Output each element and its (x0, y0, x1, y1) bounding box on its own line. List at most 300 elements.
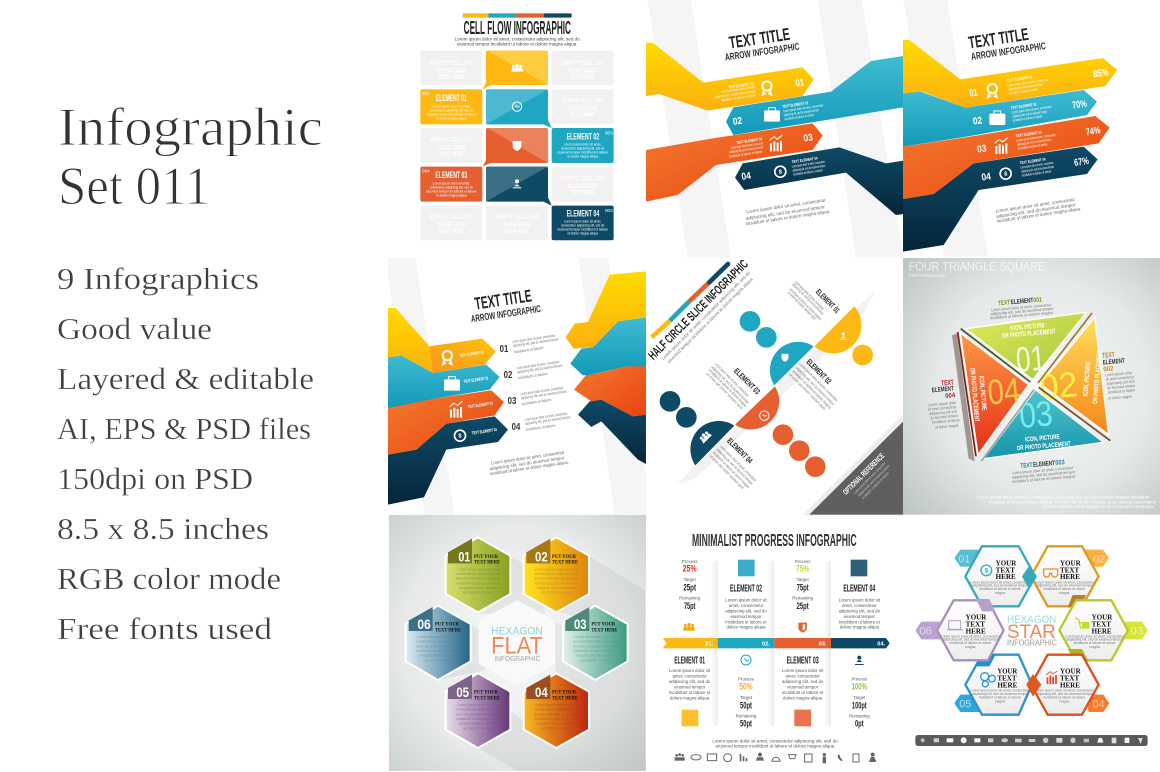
yellow ribbon: Lorem ipsum dolor sit amet, consectetur (721, 85, 756, 94)
hexagon 04 red: incididunt ut labore et dolore (1043, 695, 1085, 699)
hexagon 01 teal: incididunt ut labore et dolore (979, 587, 1021, 591)
hexagon 04: sed do eiusmod tempor (534, 711, 579, 716)
panel: hexagon flat infographic (389, 515, 646, 771)
footer text (976, 495, 1157, 509)
teal arrow (903, 90, 1097, 147)
hexagon 02: 02 (535, 548, 548, 564)
hexagon 03: consectetur adipiscing elit (573, 639, 619, 644)
empty cell labels: EMPTY CELL 001 (430, 60, 473, 67)
hexagon 05: magna aliqua ut enim (459, 721, 499, 726)
navy arrow: adipiscing elit, sed do eiusmod tempor (1021, 165, 1055, 174)
text element 003: ELEMENT (1033, 460, 1055, 469)
empty cells (420, 51, 614, 240)
text element 004: Lorem ipsum dolor (928, 400, 957, 407)
element 04 block: Lorem ipsum dolor sit (839, 597, 881, 602)
element 04 block: eiusmod tempor (844, 614, 875, 619)
intro text: Lorem ipsum dolor sit amet, consectetur adipiscing elit, sed do (455, 36, 580, 41)
central label: HEXAGON (491, 626, 543, 638)
hexagon 04: PUT YOUR (552, 691, 576, 696)
feature list: 150dpi on PSD (57, 461, 253, 496)
orange arrow (903, 116, 1110, 199)
hexagon 05 blue: adipiscing elit, sed do eiusmod tempor (972, 692, 1029, 696)
text element 002: sit amet consectetur (1106, 374, 1134, 382)
left orange arrow (388, 390, 504, 455)
empty cell labels: PLEASE ENTER (568, 183, 597, 190)
body text: adipiscing elit, sed do eiusmod tempor (489, 455, 565, 471)
text element 003: 003 (1055, 459, 1065, 467)
element 04 block: amet, consectetur (842, 603, 877, 608)
text element 004: et dolore magna (935, 423, 959, 430)
hexagon 01: 01 (458, 548, 470, 564)
footer text: Lorem ipsum dolor sit amet, consectetur adipiscing elit, sed do eiusmod tempor incididunt (976, 495, 1150, 500)
intro text (455, 36, 580, 46)
triangle 01 green: 01 (1014, 339, 1047, 380)
text element 002: adipiscing elit sed (1106, 379, 1135, 386)
text element 004: incididunt ut labore (932, 417, 961, 425)
element 01 block: Lorem ipsum dolor sit (669, 668, 711, 673)
hexagon 06: Lorem ipsum dolor sit amet (417, 634, 461, 639)
hexagon 03 (563, 606, 628, 680)
yellow arrow (903, 40, 1117, 108)
step number 04: 04 (512, 422, 521, 433)
element 01: incididunt ut labore et dolore magna (789, 287, 823, 321)
hexagon 02: TEXT HERE (552, 561, 579, 566)
element 03: et dolore magna aliqua (436, 193, 467, 197)
badge 05 (954, 695, 980, 712)
left teal arrow: TEXT ELEMENT 02 (463, 375, 489, 384)
element 02: et dolore magna aliqua (567, 155, 599, 159)
element 04 block: dolore magna aliqua (840, 625, 880, 630)
hexagon 01 teal: $ (984, 568, 988, 575)
progress 02 stats: 50pt (740, 719, 752, 729)
hexagon 02: ad minim veniam (541, 590, 572, 595)
progress 01 stats: 75pt (684, 601, 695, 611)
teal ribbon: incididunt ut labore et dolore (784, 113, 814, 121)
hexagon 05 blue: incididunt ut labore et dolore (979, 695, 1021, 699)
orange arrow: adipiscing elit, sed do eiusmod tempor (1017, 137, 1052, 147)
body text (745, 197, 831, 226)
progress 03 stats: Target (797, 577, 809, 582)
hexagon 06 purple: TEXT (966, 620, 985, 629)
hexagon 02: PUT YOUR (552, 555, 576, 560)
hexagon 02: consectetur adipiscing elit (534, 571, 580, 576)
feature list: 8.5 x 8.5 inches (57, 511, 269, 546)
yellow ribbon: TEXT ELEMENT 01 (728, 81, 755, 90)
left yellow arrow: TEXT ELEMENT 01 (459, 349, 484, 358)
footer icon row (675, 753, 876, 763)
dark divider edges (958, 313, 1110, 461)
badge 04: 04 (1093, 699, 1105, 711)
progress 04 stats: 100% (852, 682, 867, 692)
hexagon 04: Lorem ipsum dolor sit amet (535, 702, 578, 707)
heading: half circle slice: HALF CIRCLE SLICE INFOGRAPHIC (646, 257, 751, 362)
hexagon 03: 03 (574, 616, 587, 632)
step number 01: 01 (500, 344, 509, 355)
hexagon 03: ad minim veniam (580, 657, 611, 662)
empty cell labels: EMPTY CELL 005 (430, 214, 473, 221)
hexagon 06 purple: magna (965, 645, 976, 649)
element 01 block: dolore magna aliqua (670, 695, 710, 700)
hexagon 03 lime: magna (1090, 645, 1100, 649)
step number 04: incididunt ut labore (525, 422, 556, 432)
orange flow cell (483, 128, 548, 166)
body text: incididunt ut labore et dolore magna aliqua. (996, 206, 1082, 224)
badge 04 (1085, 695, 1109, 712)
element 02: ELEMENT 02 (805, 357, 833, 386)
element 03: incididunt ut labore et dolore magna (708, 368, 748, 408)
step number 04 (512, 411, 571, 433)
hexagon 03 lime: TEXT (1092, 620, 1111, 629)
footer text: eiusmod tempor incididunt ut labore et dolore magna aliqua (716, 743, 835, 748)
panel: half circle slice infographic (646, 257, 903, 515)
hexagon 01: sed do eiusmod tempor (456, 576, 501, 581)
text element 002: ELEMENT (1103, 358, 1125, 367)
text element 004: do eiusmod tempor (930, 413, 959, 420)
triangle 02 orange: ICON, PICTURE (1082, 361, 1092, 396)
progress 03 stats: 75% (796, 564, 810, 574)
navy arrow: 67% (1073, 156, 1090, 169)
hexagon 03 lime (1059, 600, 1128, 662)
left teal arrow (388, 355, 500, 408)
feature list: Good value (57, 311, 212, 346)
heading: text title (967, 24, 1047, 63)
element 04: et dolore magna aliqua (567, 232, 599, 236)
icon: clock teal (741, 655, 751, 665)
step number 02: 02 (504, 370, 513, 381)
hexagon 06 (406, 606, 471, 680)
central hexagon (479, 600, 555, 685)
heading: four triangle square (909, 260, 1045, 279)
element 01: Lorem ipsum dolor sit amet, consectetur (794, 279, 826, 311)
background band (904, 0, 988, 257)
element 03: eiusmod tempor incididunt ut labore (426, 189, 477, 193)
element 04: 003 (605, 208, 613, 213)
element 02 block: Lorem ipsum dolor sit (725, 597, 767, 602)
element 01: adipiscing elit, sed do eiusmod tempor (791, 282, 826, 316)
step number 04: Lorem ipsum dolor sit amet, consectetur (524, 411, 568, 422)
triangle 02 orange: 02 (1038, 365, 1079, 407)
hexagon 01 teal: HERE (996, 572, 1016, 581)
text element 001: incididunt ut labore et dolore magna (990, 310, 1054, 320)
progress 01 stats: Process (682, 559, 697, 564)
hexagon 05 blue: Lorem ipsum dolor sit amet, consectetur (970, 689, 1030, 693)
orange ribbon: TEXT ELEMENT 03 (736, 136, 763, 145)
long shadows (438, 556, 645, 771)
color bar (652, 264, 728, 337)
text element 003 (1012, 459, 1076, 484)
step number 02: incididunt ut labore (517, 371, 548, 380)
yellow arrow: 01 (969, 88, 979, 100)
element 03: ut enim ad minim veniam quis (705, 371, 744, 410)
hexagon 01 teal: YOUR (996, 558, 1017, 567)
badge 03 (1124, 622, 1148, 639)
element 04: consectetur adipiscing elit, sed do (561, 224, 604, 228)
element 02: Lorem ipsum dolor sit amet, consectetur (798, 361, 840, 403)
panel: arrow infographic with percentages (903, 0, 1117, 257)
navy half circle (660, 391, 734, 465)
body text: Lorem ipsum dolor sit amet, consectetur (491, 450, 565, 466)
element 02: eiusmod tempor incididunt ut labore (557, 151, 608, 155)
hexagon 04 red: adipiscing elit, sed do eiusmod tempor (1036, 692, 1094, 696)
hexagon 04: ad minim veniam (541, 725, 572, 730)
navy ribbon: adipiscing elit, sed do eiusmod tempor (792, 164, 826, 173)
panel: cell flow infographic: CELL FLOW INFOGRAPHIC (464, 17, 571, 38)
yellow ribbon: adipiscing elit, sed do eiusmod tempor (715, 89, 757, 99)
triangle 04 red: 04 (986, 371, 1022, 413)
step number 01: Lorem ipsum dolor sit amet, consectetur (512, 333, 556, 344)
yellow arrow: incididunt ut labore et dolore (1009, 87, 1039, 96)
footer text: ullamco laboris nisi ut aliquip ex ea commodo consequat. (1042, 504, 1155, 509)
yellow ribbon: 01 (795, 77, 805, 90)
empty cell labels: PLEASE ENTER (568, 105, 597, 112)
element 03 (420, 167, 482, 202)
element 03: consectetur adipiscing elit, sed do (430, 185, 473, 189)
progress 02 stats: 50pt (740, 700, 752, 710)
background (903, 258, 1160, 515)
hexagon 05 blue: HERE (997, 680, 1017, 689)
body text: adipiscing elit, sed do eiusmod tempor (996, 202, 1076, 219)
panel: cell flow infographic (420, 13, 614, 240)
yellow ribbon (646, 43, 814, 111)
element 04: eiusmod tempor incididunt ut labore (557, 228, 608, 232)
element 01 block: adipiscing elit, sed do (669, 679, 711, 684)
element 01 block: incididunt ut labore et (669, 690, 711, 695)
progress 02 stats: Target (740, 695, 753, 700)
text element 002: et dolore magna (1108, 394, 1133, 401)
element 01 (420, 89, 482, 124)
right ribbon stack (566, 271, 646, 464)
text element 004: ELEMENT (932, 385, 954, 394)
element 04: Lorem ipsum dolor sit amet, (564, 220, 601, 224)
element 02: incididunt ut labore et dolore magna (791, 368, 833, 410)
heading: text title: TEXT TITLE (473, 285, 533, 314)
hexagon 01: incididunt ut labore et dolore (456, 580, 501, 585)
hexagon 01: ad minim veniam (463, 590, 494, 595)
step number 03 (508, 385, 567, 407)
text element 003: TEXT (1020, 462, 1033, 470)
progress 02 stats: 50% (739, 682, 753, 692)
teal ribbon: 02 (732, 116, 743, 128)
element 04: incididunt ut labore et dolore magna (712, 450, 751, 489)
teal flow cell (486, 89, 552, 128)
left orange arrow: TEXT ELEMENT 03 (467, 401, 494, 409)
hexagon 06: consectetur adipiscing elit (416, 639, 462, 644)
hexagon 02 amber: magna (1059, 591, 1070, 595)
text element 001: ELEMENT (1011, 297, 1034, 306)
element 02 (552, 128, 614, 163)
element 03: Lorem ipsum dolor sit amet, (433, 181, 470, 185)
progress 04 stats: 100pt (852, 700, 867, 710)
hexagon 02: sed do eiusmod tempor (534, 576, 579, 581)
yellow arrow: adipiscing elit, sed do eiusmod tempor (1008, 82, 1044, 92)
triangle 04 red: ICON, PICTURE (977, 376, 987, 411)
panel: four triangle square (903, 258, 1160, 515)
text element 002: Lorem ipsum dolor (1105, 370, 1133, 377)
text element 004: TEXT (941, 378, 954, 388)
empty cell labels: TEXT HERE (570, 112, 596, 119)
element 01 block (669, 656, 711, 726)
text element 004: sit amet consectetur (928, 404, 957, 412)
orange arrow: 03 (976, 143, 988, 156)
progress 01 stats: Target (684, 577, 696, 582)
navy ribbon (735, 147, 903, 215)
icon: shield orange (798, 623, 807, 633)
element 02 block: adipiscing elit, sed do (725, 608, 767, 613)
hexagon 06: PUT YOUR (435, 623, 459, 628)
hexagon 02 amber (1031, 546, 1099, 607)
text element 001: Lorem ipsum dolor sit amet, consectetur (991, 302, 1052, 312)
empty cell labels (430, 60, 605, 235)
empty cell labels: PLEASE ENTER (437, 221, 466, 228)
element 02 block (725, 560, 767, 630)
element 04: Lorem ipsum dolor sit amet, consectetur (719, 443, 758, 483)
heading: four triangle square: FOUR TRIANGLE SQUARE (909, 260, 1045, 274)
yellow arrow: Lorem ipsum dolor sit amet, consectetur (1007, 78, 1049, 88)
empty cell labels: TEXT HERE (570, 190, 596, 197)
optional reference corner: adipiscing elit, sed do eiusmod tempor (857, 464, 891, 497)
body text: incididunt ut labore et dolore magna aliqua. (489, 460, 569, 476)
step number 04: adipiscing elit, sed do eiusmod tempor (525, 414, 571, 426)
element 02: ut enim ad minim veniam quis (788, 372, 827, 411)
element 01: consectetur adipiscing elit, sed do (430, 109, 473, 113)
hexagon 03: Lorem ipsum dolor sit amet (574, 634, 617, 639)
step number 03: adipiscing elit, sed do eiusmod tempor (521, 388, 567, 400)
text element 003: adipiscing elit, sed do eiusmod tempor (1012, 469, 1076, 480)
element 01 block: amet, consectetur (672, 674, 707, 679)
intro text: Lorem ipsum dolor sit amet, consectetur adipiscing elit, sed do (661, 270, 752, 361)
hexagon 02 (524, 537, 589, 612)
element 04: ut enim ad minim veniam quis (709, 453, 745, 490)
feature list: Free fonts used (57, 611, 273, 646)
hexagon 03: incididunt ut labore et dolore (573, 648, 618, 653)
central label (1007, 614, 1057, 647)
timeline ribbon: 02. (762, 642, 770, 648)
text element 004 (928, 378, 961, 430)
teal arrow: adipiscing elit, sed do eiusmod tempor (1012, 109, 1048, 119)
empty cell labels: EMPTY CELL 002 (561, 98, 604, 105)
element 03: Lorem ipsum dolor sit amet, consectetur (714, 361, 750, 398)
icon: people yellow (683, 623, 695, 631)
timeline ribbon: 04. (877, 642, 886, 648)
yellow flow cell (483, 51, 548, 89)
badge 06 (915, 622, 942, 639)
body text (489, 450, 569, 476)
timeline ribbon: 01. (705, 642, 714, 648)
timeline ribbon: 03. (819, 642, 827, 648)
background bands (388, 258, 646, 515)
optional reference corner: incididunt ut labore et dolore (861, 471, 890, 500)
footer text: ut labore et dolore magna aliqua. Ut enim ad minim veniam, quis nostrud exercitation (988, 499, 1157, 504)
element 02 block: dolore magna aliqua (726, 625, 766, 630)
element 03 block: eiusmod tempor (787, 685, 819, 690)
teal arrow: incididunt ut labore et dolore (1013, 114, 1043, 123)
empty cell labels: EMPTY CELL 301 (561, 60, 604, 67)
hexagon 04: 04 (535, 684, 548, 700)
progress 04 stats: Target (853, 695, 866, 700)
background (389, 515, 646, 771)
progress 04 stats: Remaining (849, 713, 870, 718)
empty cell labels: TEXT HERE (439, 74, 464, 81)
feature list: AI, EPS & PSD files (57, 411, 311, 446)
orange ribbon: 03 (803, 132, 814, 145)
element 01: 002 (422, 91, 430, 96)
element 01 block: eiusmod tempor (674, 685, 706, 690)
text element 002: 002 (1103, 365, 1114, 373)
body text: incididunt ut labore et dolore magna aliqua. (745, 209, 831, 226)
element 02 block: amet, consectetur (729, 603, 764, 608)
hexagon 01 (446, 537, 510, 612)
navy arrow: Lorem ipsum dolor sit amet, consectetur (1020, 161, 1054, 170)
hexagon 02 amber: TEXT (1060, 565, 1079, 574)
hexagon 02 amber: adipiscing elit, sed do eiusmod tempor (1036, 584, 1094, 588)
orange half circle (735, 386, 826, 477)
empty cell labels: EMPTY CELL 003 (430, 137, 473, 144)
hexagon 02 amber: Lorem ipsum dolor sit amet, consectetur (1035, 580, 1095, 584)
element 04: adipiscing elit, sed do eiusmod tempor (715, 447, 755, 486)
central label: FLAT (491, 632, 543, 659)
heading: text title: ARROW INFOGRAPHIC (724, 42, 800, 64)
element 04 block: adipiscing elit, sed do (839, 608, 881, 613)
navy arrow: 04 (981, 171, 992, 184)
progress 04 stats (849, 676, 870, 729)
teal ribbon: Lorem ipsum dolor sit amet, consectetur (783, 103, 824, 113)
empty cell labels: TEXT HERE (570, 74, 596, 81)
hexagon 05: ad minim veniam (463, 725, 494, 730)
badge 03: 03 (1131, 625, 1143, 637)
hexagon 02: magna aliqua ut enim (537, 585, 577, 590)
badge 01: 01 (959, 553, 970, 565)
hexagon 06: 06 (417, 616, 431, 632)
yellow arrow: TEXT ELEMENT 01 (1006, 74, 1033, 83)
heading: text title (724, 24, 800, 64)
navy ribbon: incididunt ut labore et dolore (793, 168, 823, 177)
progress 03 stats (792, 559, 814, 611)
hexagon 01: PUT YOUR (474, 555, 498, 560)
panel: hexagon star infographic (915, 546, 1148, 746)
triangle 01 green (965, 312, 1086, 380)
feature list (57, 261, 314, 646)
element 04 block: incididunt ut labore et (839, 619, 881, 624)
element 03 block: dolore magna aliqua (783, 695, 823, 700)
hexagon 03 lime: YOUR (1092, 613, 1113, 622)
hexagon 03 lime: HERE (1092, 626, 1112, 635)
step number 02: adipiscing elit, sed do eiusmod tempor (517, 363, 563, 374)
hexagon 06: sed do eiusmod tempor (416, 643, 462, 648)
badge 01 (954, 550, 982, 567)
badge 06: 06 (919, 625, 932, 637)
empty cell labels: EMPTY CELL 006 (495, 214, 539, 221)
panel: minimalist progress infographic (663, 530, 890, 763)
title: Infographic (58, 97, 323, 157)
hexagon 04 red: HERE (1060, 680, 1080, 689)
orange ribbon: adipiscing elit, sed do eiusmod tempor (729, 145, 764, 154)
text element 003: incididunt ut labore et dolore magna (1012, 473, 1076, 484)
triangle 04 red: OR PHOTO PLACEMENT (968, 368, 980, 422)
central label: INFOGRAPHIC (1007, 638, 1057, 647)
element 03: 004 (422, 169, 430, 174)
body text: Lorem ipsum dolor sit amet, consectetur (995, 197, 1076, 214)
title (58, 97, 323, 216)
empty cell labels: TEXT HERE (504, 228, 530, 235)
text element 001: TEXT (998, 299, 1010, 307)
element 04 block: ELEMENT 04 (843, 584, 876, 595)
step number 03: Lorem ipsum dolor sit amet, consectetur (520, 385, 564, 396)
central label: HEXAGON (1007, 614, 1056, 626)
progress 01 stats: Remaining (679, 595, 701, 600)
feature list: Layered & editable (57, 361, 314, 396)
navy ribbon: TEXT ELEMENT 04 (791, 155, 818, 164)
panel: arrow infographic crossing (646, 0, 903, 257)
